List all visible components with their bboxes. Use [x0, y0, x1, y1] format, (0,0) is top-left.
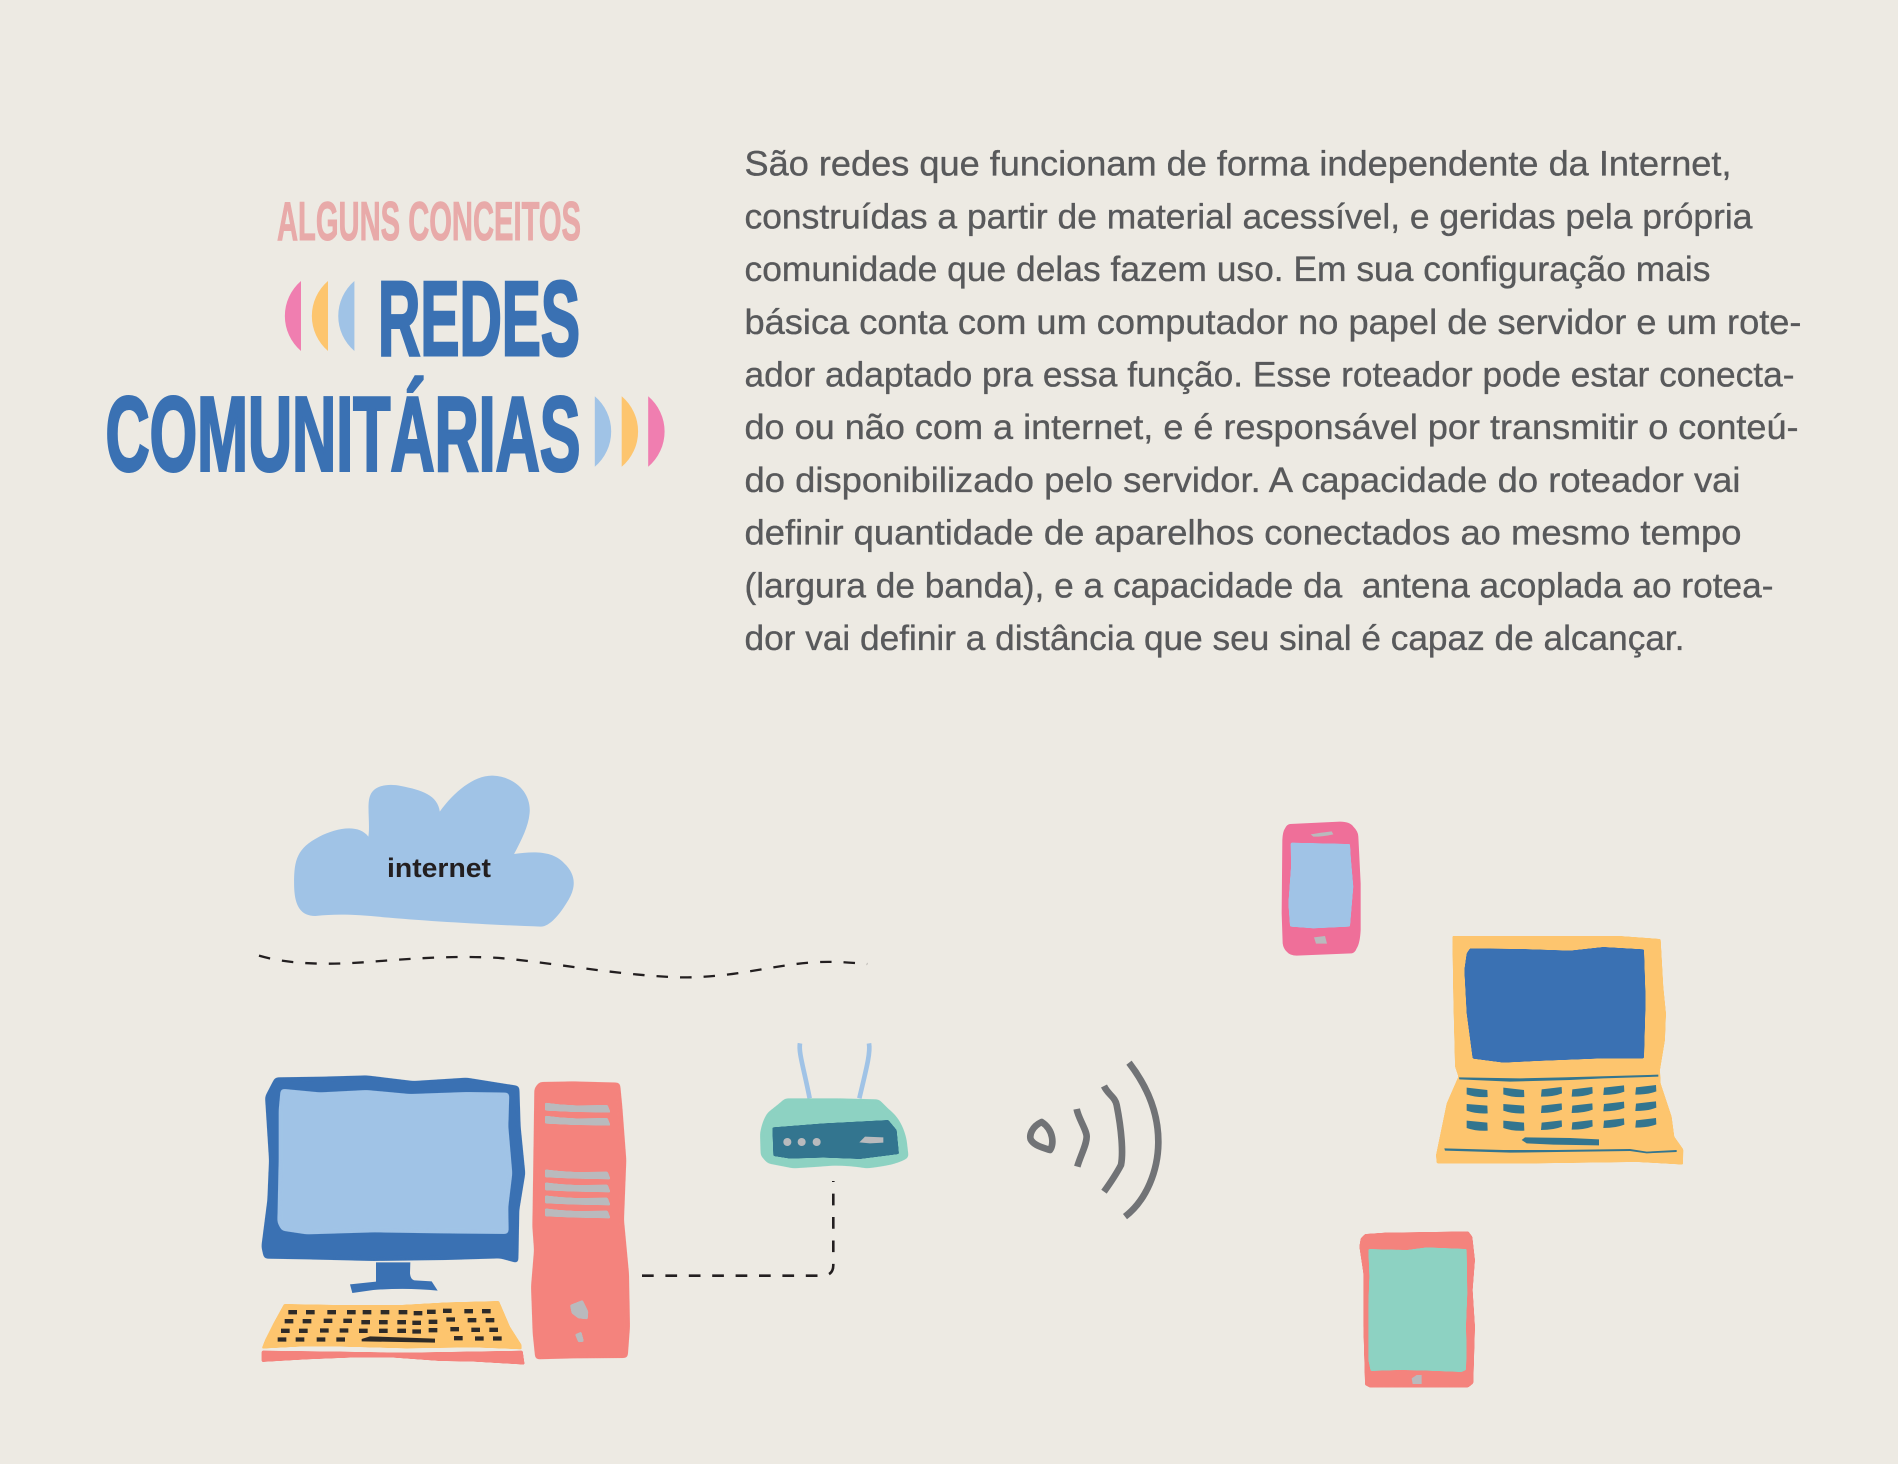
icon: router: [760, 1043, 909, 1168]
monitor: [261, 1075, 525, 1263]
text block: body paragraph: comunidade que delas fazem uso. Em sua configuração mais: [744, 250, 1710, 289]
title line: comunitarias: COMUNITÁRIAS: [106, 376, 580, 494]
icon: smartphone: [1282, 822, 1361, 956]
dashed line: internet boundary: [259, 956, 867, 977]
text block: body paragraph: construídas a partir de material acessível, e geridas pela própria: [744, 197, 1753, 236]
monitor stand: [350, 1262, 438, 1293]
text block: body paragraph: dor vai definir a distância que seu sinal é capaz de alcançar.: [744, 619, 1684, 658]
icon: left half circles: [285, 281, 354, 351]
text block: body paragraph: [744, 145, 1802, 658]
icon: internet cloud: [294, 776, 574, 927]
text block: body paragraph: ador adaptado pra essa função. Esse roteador pode estar conecta-: [744, 356, 1794, 394]
icon: wifi signal waves: [1030, 1063, 1158, 1217]
title line: redes: REDES: [378, 260, 580, 378]
heading: title block: [106, 190, 665, 493]
keyboard: [262, 1301, 525, 1365]
text block: body paragraph: do disponibilizado pelo servidor. A capacidade do roteador vai: [744, 461, 1740, 500]
text block: body paragraph: definir quantidade de aparelhos conectados ao mesmo tempo: [744, 514, 1742, 553]
icon: desktop computer: [261, 1075, 630, 1365]
kicker: alguns conceitos: ALGUNS CONCEITOS: [277, 190, 581, 252]
text block: body paragraph: do ou não com a internet, e é responsável por transmitir o conteú-: [744, 408, 1798, 447]
text block: body paragraph: São redes que funcionam de forma independente da Internet,: [744, 145, 1732, 184]
text block: body paragraph: básica conta com um computador no papel de servidor e um rote-: [744, 303, 1802, 342]
icon: tablet: [1359, 1231, 1475, 1388]
icon: right half circles: [595, 396, 665, 467]
label: internet: internet: [387, 853, 491, 883]
dashed connector: computer to router: [642, 1181, 833, 1276]
icon: laptop: [1436, 936, 1683, 1165]
text block: body paragraph: (largura de banda), e a capacidade da antena acoplada ao rotea-: [744, 566, 1774, 605]
tower case: [531, 1081, 630, 1359]
